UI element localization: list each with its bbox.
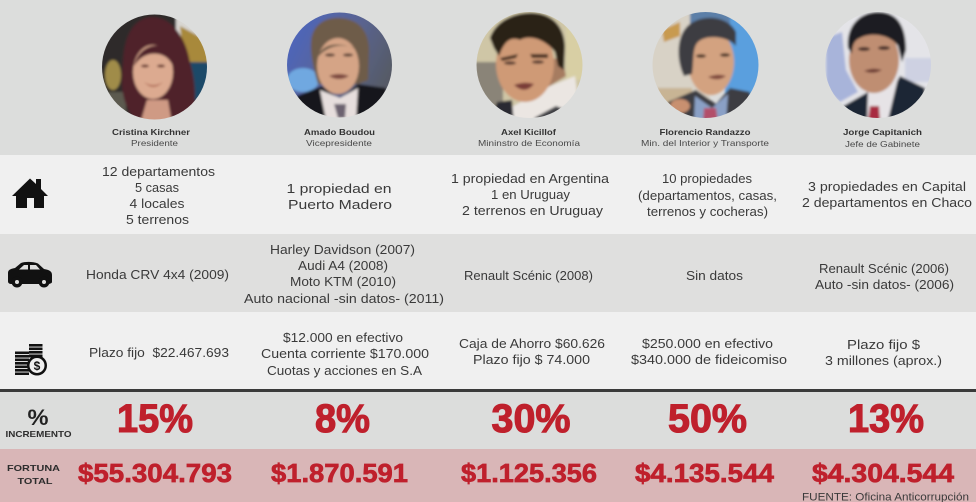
- panel: properties row: [0, 155, 976, 234]
- text: Boudou money: $12.000 en efectivo: [283, 330, 403, 345]
- label: Axel Kicillof: Axel Kicillof: [501, 127, 556, 137]
- text: Boudou vehicles: Audi A4 (2008): [298, 258, 388, 273]
- label: Axel Kicillof: Mininstro de Economía: [478, 138, 580, 148]
- text: Capitanich money: Plazo fijo $: [847, 337, 921, 352]
- label: fortuna total: TOTAL: [18, 476, 52, 486]
- text: Boudou money: Cuenta corriente $170.000: [261, 346, 429, 361]
- value: 13%: 13%: [848, 397, 924, 441]
- text: Kirchner properties: 5 terrenos: [126, 212, 190, 227]
- text: Kicillof properties: 1 propiedad en Argentina: [451, 171, 610, 186]
- text: Capitanich money: [825, 337, 942, 368]
- label: Axel Kicillof: [478, 127, 580, 148]
- label: Amado Boudou: Amado Boudou: [304, 127, 375, 137]
- value: $55.304.793: $55.304.793: [78, 458, 232, 488]
- label: Jorge Capitanich: Jorge Capitanich: [843, 127, 922, 137]
- label: Florencio Randazzo: Florencio Randazzo: [660, 127, 750, 137]
- icon: coins: [15, 344, 47, 376]
- label: Cristina Kirchner: Presidente: [131, 138, 178, 148]
- text: Randazzo vehicles: Sin datos: [686, 268, 744, 283]
- text: Capitanich vehicles: [815, 261, 954, 292]
- text: Kicillof vehicles: Renault Scénic (2008): [464, 268, 593, 283]
- portrait: Amado Boudou: [287, 12, 392, 118]
- text: Kirchner money: Plazo fijo $22.467.693: [89, 345, 229, 360]
- label: Cristina Kirchner: [112, 127, 191, 148]
- text: Kirchner properties: 4 locales: [130, 196, 185, 211]
- text: Capitanich properties: 2 departamentos en Chaco: [802, 195, 972, 210]
- panel: header with portraits: [102, 12, 931, 148]
- panel: money row: [0, 312, 976, 390]
- value: 50%: 50%: [668, 397, 747, 441]
- value: $1.870.591: $1.870.591: [271, 458, 408, 488]
- text: Randazzo properties: (departamentos, casas,: [638, 188, 777, 203]
- text: Kirchner properties: [102, 164, 216, 227]
- text: Boudou vehicles: Harley Davidson (2007): [270, 242, 415, 257]
- value: 15%: 15%: [117, 397, 193, 441]
- label: % increment: [6, 405, 72, 439]
- label: Cristina Kirchner: Cristina Kirchner: [112, 127, 191, 137]
- text: Kicillof money: Caja de Ahorro $60.626: [459, 336, 605, 351]
- portrait: Cristina Kirchner: [102, 14, 207, 120]
- text: Boudou vehicles: [244, 242, 444, 306]
- text: Boudou properties: [286, 181, 392, 212]
- text: Kirchner vehicles: Honda CRV 4x4 (2009): [86, 267, 229, 282]
- value: $1.125.356: $1.125.356: [461, 458, 597, 488]
- value: 30%: 30%: [492, 397, 570, 441]
- text: Capitanich properties: [802, 179, 972, 210]
- value: $4.135.544: $4.135.544: [635, 458, 775, 488]
- label: Amado Boudou: Vicepresidente: [306, 138, 372, 148]
- text: Randazzo money: $340.000 de fideicomiso: [631, 352, 787, 367]
- text: Kicillof money: Plazo fijo $ 74.000: [473, 352, 590, 367]
- text: Capitanich vehicles: Renault Scénic (2006): [819, 261, 949, 276]
- text: Capitanich money: 3 millones (aprox.): [825, 353, 942, 368]
- icon: house: [12, 178, 48, 208]
- text: Kicillof money: [459, 336, 605, 367]
- text: Kicillof properties: 2 terrenos en Uruguay: [462, 203, 604, 218]
- label: fortuna total: [7, 463, 60, 486]
- label: Jorge Capitanich: Jefe de Gabinete: [845, 139, 920, 149]
- text: Kirchner properties: 12 departamentos: [102, 164, 216, 179]
- label: Florencio Randazzo: Min. del Interior y Transporte: [641, 138, 769, 148]
- panel: total fortune row: [0, 449, 976, 502]
- value: $4.304.544: $4.304.544: [812, 458, 955, 488]
- icon: coins: $: [34, 359, 41, 373]
- label: % increment: INCREMENTO: [6, 429, 72, 439]
- text: Boudou vehicles: Auto nacional -sin datos- (2011): [244, 291, 444, 306]
- label: Jorge Capitanich: [843, 127, 922, 149]
- text: Randazzo money: [631, 336, 787, 367]
- text: Boudou money: Cuotas y acciones en S.A: [267, 363, 422, 378]
- portrait: Jorge Capitanich: [825, 10, 935, 122]
- text: Boudou money: [261, 330, 429, 378]
- panel: vehicles row: [0, 234, 976, 312]
- text: Boudou vehicles: Moto KTM (2010): [290, 274, 396, 289]
- text: Kicillof properties: 1 en Uruguay: [491, 187, 570, 202]
- label: Amado Boudou: [304, 127, 375, 148]
- label: % increment: %: [28, 405, 48, 430]
- text: Kirchner properties: 5 casas: [135, 180, 179, 195]
- text: Boudou properties: 1 propiedad en: [286, 181, 392, 196]
- text: Capitanich properties: 3 propiedades en Capital: [808, 179, 966, 194]
- text: Randazzo properties: 10 propiedades: [662, 171, 752, 186]
- text: Boudou properties: Puerto Madero: [288, 197, 392, 212]
- portrait: Florencio Randazzo: [650, 10, 761, 122]
- text: Kicillof properties: [451, 171, 610, 218]
- value: 8%: 8%: [315, 397, 370, 441]
- text: Randazzo properties: [638, 171, 777, 219]
- label: Florencio Randazzo: [641, 127, 769, 148]
- label: fortuna total: FORTUNA: [7, 463, 60, 473]
- portrait: Axel Kicillof: [476, 12, 582, 118]
- text: Randazzo money: $250.000 en efectivo: [642, 336, 773, 351]
- text: Randazzo properties: terrenos y cocheras): [647, 204, 768, 219]
- panel: percentage increase row: [0, 392, 976, 449]
- icon: car: [8, 262, 52, 288]
- text: Capitanich vehicles: Auto -sin datos- (2006): [815, 277, 954, 292]
